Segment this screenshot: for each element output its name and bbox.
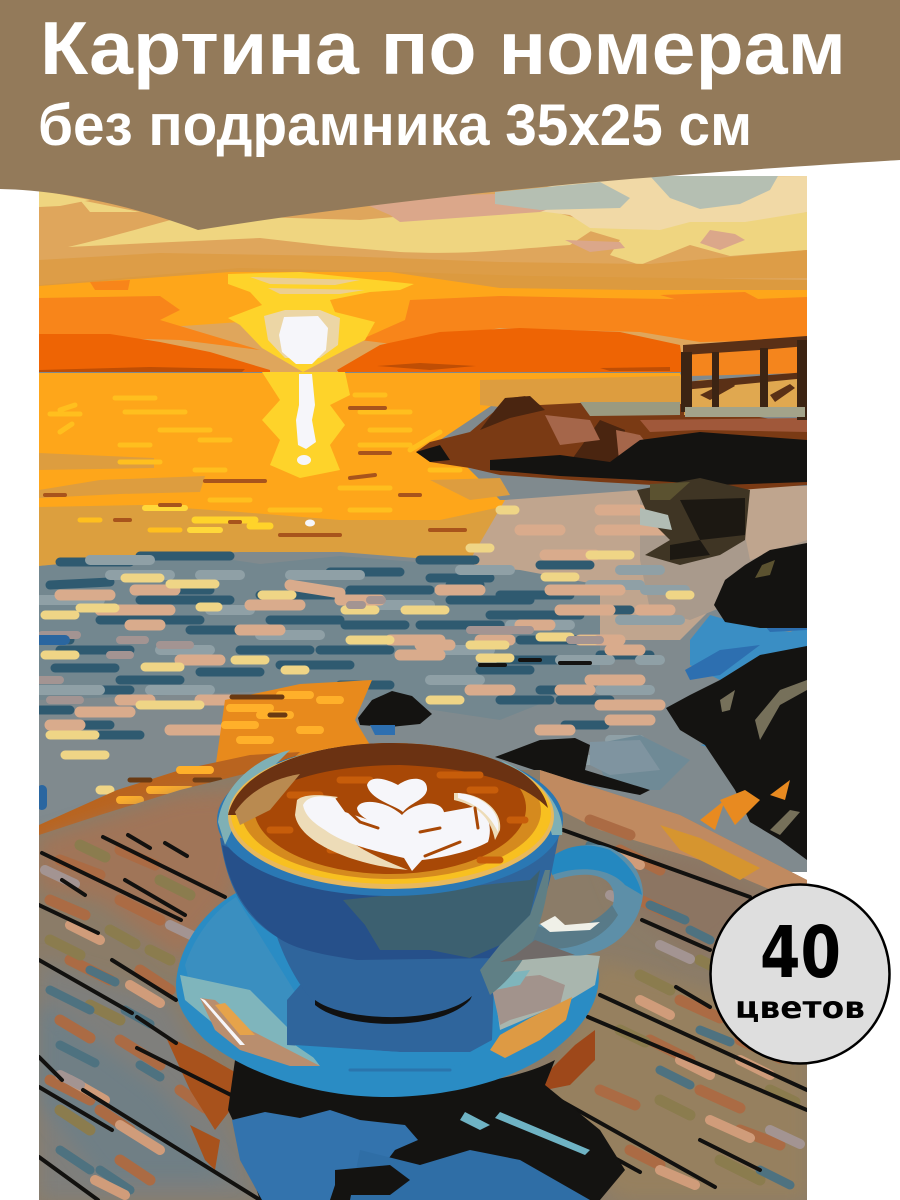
wood brush strokes	[45, 820, 800, 1195]
latte art	[295, 779, 500, 871]
rock: behind cup	[495, 738, 650, 795]
shadow under saucer	[228, 1060, 625, 1200]
sunset glow on water	[215, 680, 372, 770]
saucer reflection on wood	[232, 1110, 418, 1200]
sky	[39, 176, 807, 376]
cup rim	[217, 744, 563, 896]
handle	[538, 844, 643, 956]
rock: upper right	[714, 543, 807, 628]
rock: lower right	[666, 646, 807, 860]
saucer	[176, 893, 600, 1097]
rocks and pier	[358, 336, 807, 860]
orange shadows on wood	[167, 1040, 234, 1170]
blue shore water	[690, 615, 807, 680]
offshore rock reflection	[637, 478, 750, 565]
coffee cup	[176, 740, 643, 1097]
title: Картина по номерам	[40, 6, 846, 90]
sea brush strokes	[40, 510, 690, 805]
sun	[228, 272, 414, 372]
wooden table	[39, 770, 807, 1200]
badge: 40 colours: 40	[760, 911, 841, 994]
cup body	[220, 836, 559, 985]
pier	[681, 336, 807, 420]
badge: 40 colours: цветов	[735, 991, 865, 1026]
coffee surface	[225, 740, 560, 890]
rock: small in sea	[358, 691, 432, 727]
badge: 40 colours	[710, 884, 890, 1064]
painting	[39, 176, 807, 1200]
plank gaps	[39, 830, 807, 1200]
header banner	[0, 0, 900, 230]
subtitle: без подрамника 35х25 см	[38, 93, 752, 158]
sea	[39, 372, 807, 872]
black line at cup base	[315, 996, 472, 1024]
